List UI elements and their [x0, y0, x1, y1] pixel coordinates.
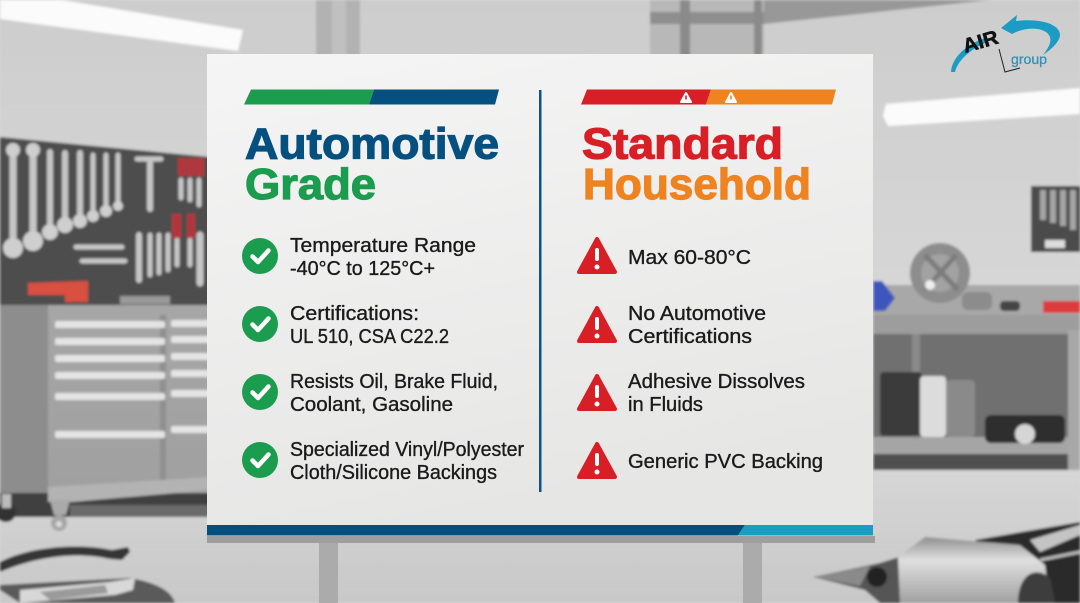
item: temperature range: Temperature Range: [290, 235, 476, 257]
sign legs: [319, 543, 762, 603]
left list: automotive grade benefits: [242, 235, 524, 484]
item: temperature range: [242, 235, 476, 280]
item: adhesive dissolves: [579, 371, 805, 416]
item: generic backing: Generic PVC Backing: [628, 451, 823, 473]
item: specialized backings: [242, 439, 524, 484]
right workbench with parts: [873, 186, 1080, 470]
item: fluid resistance: Coolant, Gasoline: [290, 394, 453, 416]
item: no certifications: [579, 303, 766, 348]
item: adhesive dissolves: in Fluids: [628, 394, 703, 416]
item: fluid resistance: [242, 371, 498, 416]
heading: Standard Household: Standard: [582, 120, 783, 168]
center divider: [539, 90, 542, 492]
item: certifications: [242, 303, 449, 348]
item: max temperature: [579, 239, 751, 272]
heading: Standard Household: Household: [583, 160, 811, 209]
right list: household limitations: [579, 239, 823, 477]
item: max temperature: Max 60-80°C: [628, 247, 751, 269]
logo: AIR group: [951, 15, 1060, 72]
bottom accent bar: [207, 525, 873, 536]
right top accent bar: [581, 90, 836, 104]
left top accent bar: [244, 90, 499, 104]
ceiling light right: [883, 88, 1080, 126]
pegboard with tools: [0, 137, 210, 310]
item: certifications: UL 510, CSA C22.2: [290, 326, 449, 348]
item: generic backing: [579, 444, 823, 477]
item: specialized backings: Specialized Vinyl/Polyester: [290, 439, 524, 461]
item: adhesive dissolves: Adhesive Dissolves: [628, 371, 805, 393]
item: specialized backings: Cloth/Silicone Backings: [290, 462, 497, 484]
logo: AIR group: group: [1011, 51, 1047, 67]
heading: Automotive Grade: Automotive: [245, 120, 499, 168]
item: temperature range: -40°C to 125°C+: [290, 258, 435, 280]
tool cabinet: [0, 305, 210, 531]
item: fluid resistance: Resists Oil, Brake Fluid,: [290, 371, 498, 393]
item: no certifications: Certifications: [628, 326, 752, 348]
heading: Automotive Grade: Grade: [245, 160, 376, 209]
ceiling light left: [0, 0, 243, 51]
item: certifications: Certifications:: [290, 303, 419, 325]
floor objects: [0, 522, 1080, 603]
logo: AIR group: AIR: [960, 27, 1002, 58]
heading: Automotive Grade: [245, 120, 499, 209]
sign board: [207, 54, 875, 543]
heading: Standard Household: [582, 120, 811, 209]
item: no certifications: No Automotive: [628, 303, 766, 325]
